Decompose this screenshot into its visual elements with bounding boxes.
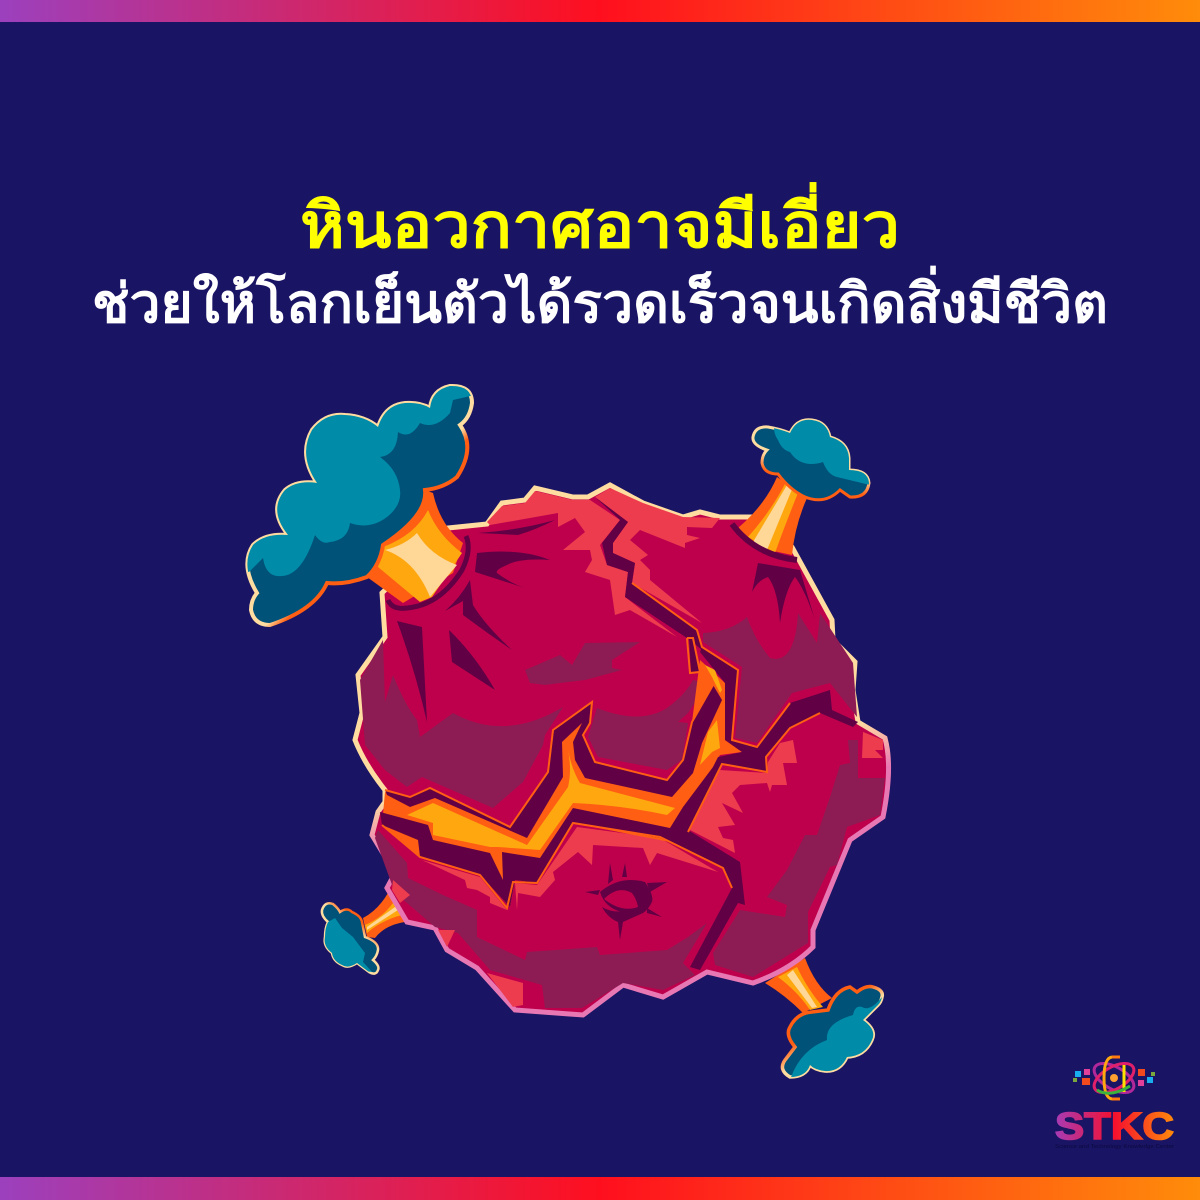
title (92, 182, 1108, 334)
headline yellow: หินอวกาศอาจมีเอี่ยว (300, 182, 900, 261)
subheadline white: ช่วยให้โลกเย็นตัวได้รวดเร็วจนเกิดสิ่งมีชีวิต (92, 265, 1108, 334)
molten yellow lava (407, 665, 722, 850)
small vent upper right (732, 477, 807, 560)
small vent lower left (363, 893, 405, 938)
logo: STKC (1055, 1057, 1174, 1150)
logo tagline: Science and Technology Knowledge Center (1055, 1144, 1174, 1150)
logo pixel dots (1073, 1069, 1155, 1086)
surface gouges (397, 520, 815, 722)
crack orange edge lines (382, 583, 820, 908)
crater eye (585, 863, 667, 940)
cloud lower right (780, 984, 884, 1079)
large cloud upper left (240, 380, 475, 625)
logo wordmark: STKC (1055, 1106, 1174, 1148)
rock body (355, 485, 889, 1015)
small vent lower right (765, 958, 832, 1013)
dark crack channels (380, 497, 858, 970)
lava crack glow (382, 660, 742, 907)
logo atom icon (1089, 1057, 1139, 1099)
rock light facets (385, 488, 883, 1007)
small cloud upper right (751, 418, 870, 502)
rock shadow facets (360, 613, 885, 1008)
small cloud lower left (320, 903, 378, 974)
top gradient bar (0, 0, 1200, 22)
large vent upper left (367, 490, 468, 608)
bottom gradient bar (0, 1177, 1200, 1200)
illustration: erupting asteroid (240, 380, 895, 1085)
